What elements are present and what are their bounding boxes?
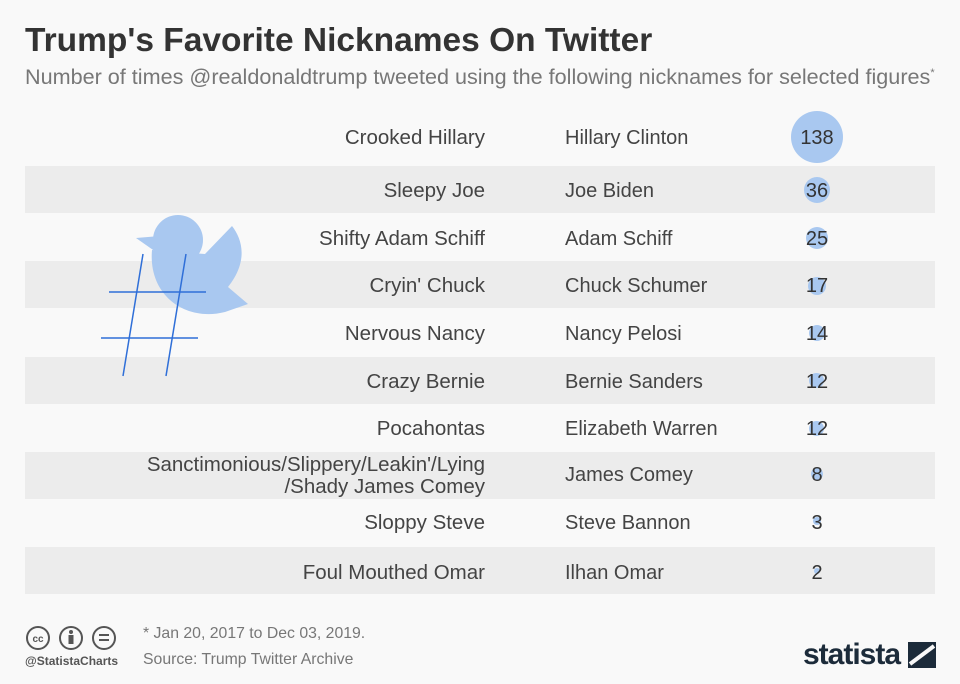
icon: cc license: cc (32, 634, 44, 645)
bubbles: 14 (806, 323, 828, 345)
rows text: Shifty Adam Schiff (319, 227, 485, 250)
rows text: Sanctimonious/Slippery/Leakin'/Lying (147, 453, 485, 476)
bubbles: 138 (800, 127, 834, 149)
bubbles: 25 (806, 228, 828, 250)
rows text: Sloppy Steve (364, 511, 485, 534)
bubbles: 2 (811, 562, 823, 584)
bubbles: 12 (806, 418, 828, 440)
footnote: * Jan 20, 2017 to Dec 03, 2019. (143, 625, 365, 642)
rows text: Crooked Hillary (345, 126, 485, 149)
title: Trump's Favorite Nicknames On Twitter (25, 22, 652, 59)
icon: twitter bird with hashtag (101, 215, 248, 376)
source: Source: Trump Twitter Archive (143, 651, 353, 668)
rows text: Crazy Bernie (366, 370, 485, 393)
statista logo: statista (803, 638, 900, 671)
rows text: Joe Biden (565, 180, 654, 202)
rows text: Hillary Clinton (565, 127, 688, 149)
rows text: Nervous Nancy (345, 322, 485, 345)
rows text: Sleepy Joe (384, 179, 485, 202)
icon: cc license (26, 626, 116, 650)
rows text: Pocahontas (377, 417, 485, 440)
rows text: Nancy Pelosi (565, 323, 682, 345)
bubbles: 3 (811, 512, 823, 534)
handle: @StatistaCharts (25, 654, 118, 668)
rows text: Steve Bannon (565, 512, 691, 534)
bubbles: 12 (806, 371, 828, 393)
rows text: /Shady James Comey (284, 475, 485, 498)
rows text: Adam Schiff (565, 228, 672, 250)
bubbles: 36 (806, 180, 828, 202)
rows text: Cryin' Chuck (369, 274, 485, 297)
rows text: James Comey (565, 464, 693, 486)
bubbles: 8 (811, 464, 823, 486)
subtitle: Number of times @realdonaldtrump tweeted using the following nicknames for selected figures* (25, 64, 935, 89)
rows text: Elizabeth Warren (565, 418, 718, 440)
bubbles: 17 (806, 275, 828, 297)
rows text: Bernie Sanders (565, 371, 703, 393)
rows text: Ilhan Omar (565, 562, 664, 584)
rows text: Foul Mouthed Omar (303, 561, 485, 584)
rows text: Chuck Schumer (565, 275, 707, 297)
